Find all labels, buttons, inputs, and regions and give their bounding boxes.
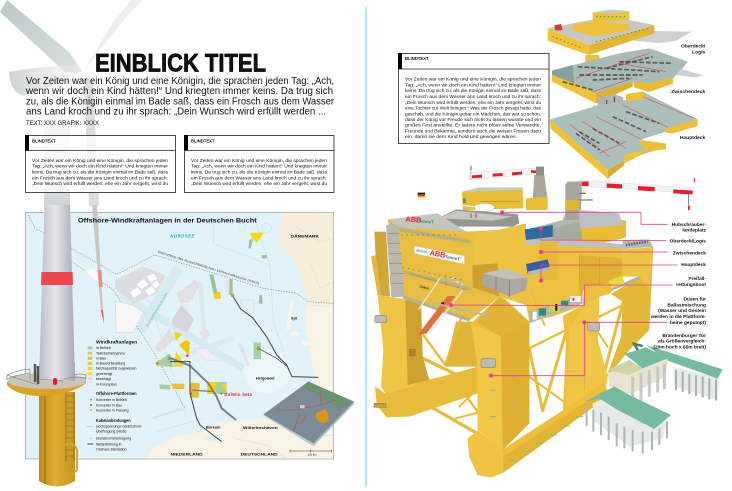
- map legend: in Konzeption: [96, 382, 117, 386]
- text box 1: BLINDTEXT: [32, 138, 56, 144]
- cable routes: [169, 296, 318, 442]
- credit line: TEXT: XXX GRAFIK: XXXX: [26, 121, 99, 127]
- wind turbine rotor blades: [0, 0, 143, 206]
- intro text: Vor Zeiten war ein König und eine Königin, die sprachen jeden Tag: „Ach,: [26, 76, 334, 87]
- map legend: Konverter in Betrieb: [96, 398, 127, 402]
- wind turbine tower: [7, 205, 86, 486]
- text box 3: ein Frosch aus dem Wasser ans Land kroch und zu ihr sprach:: [405, 94, 541, 99]
- exploded deck illustrations: [418, 9, 706, 210]
- map legend: in Betrieb: [96, 346, 111, 350]
- map legend: genehmigt: [96, 372, 112, 376]
- callout labels: Brandenburger Tor: [662, 333, 706, 339]
- deck: generator block: [593, 94, 623, 115]
- platform: front pontoon: [468, 377, 607, 477]
- map legend: Übertragung (HGÜ): [96, 430, 126, 434]
- text box 3: keins. Da trug sich zu, als die Königin einmal im Bade saß, dass: [405, 88, 541, 93]
- platform name text: Dolwin: [419, 284, 430, 291]
- platform: walkway with containers: [529, 295, 583, 323]
- callout labels: Ballastmischung: [667, 302, 706, 308]
- intro text: ans Land kroch und zu ihr sprach: „Dein Wunsch wird erfüllt werden ...: [26, 106, 326, 118]
- map place labels: Sylt: [291, 316, 298, 320]
- platform: back leg: [445, 322, 478, 367]
- lower turbine blade: [92, 205, 104, 324]
- callout labels: rettungsboot: [676, 282, 706, 288]
- map legend: [87, 339, 142, 452]
- platform: braces: [413, 290, 623, 433]
- platform: stair tower: [386, 223, 405, 297]
- text box 3: dass der König vor Freude sich nicht zu lassen wusste und ein: [405, 117, 542, 122]
- map legend: in Bauvorbereitung: [96, 362, 125, 366]
- platform: right body: [526, 242, 639, 322]
- callout labels: Freifall-: [689, 276, 706, 282]
- map place labels: [170, 233, 319, 457]
- text box 3: „Dein Wunsch wird erfüllt werden, ehe ein Jahr vergeht, wirst du: [405, 100, 541, 105]
- Brandenburg Gate size comparison: [584, 344, 723, 453]
- deck: Zwischendeck: [552, 48, 703, 103]
- map legend: Kabelanbindungen: [96, 418, 131, 423]
- platform: main block left facade: [388, 219, 526, 322]
- inset: 3D wind park block: [263, 382, 354, 446]
- map panel: offshore wind farms: [26, 205, 354, 459]
- map title: Offshore-Windkraftanlagen in der Deutschen Bucht: [78, 217, 257, 224]
- TenneT logo on deck: TenneT: [419, 218, 434, 225]
- text box 3: großes Fest anstellte. Er ladete nicht bloss seine Verwandte,: [405, 123, 541, 128]
- map legend: Konverter in Planung: [96, 408, 129, 412]
- map place labels: DolWin beta: [224, 392, 253, 397]
- intro text: wenn wir doch ein Kind hätten!“ Und kriegten immer keins. Da trug sich: [25, 86, 333, 97]
- map legend: Windkraftanlagen: [96, 339, 138, 344]
- banner: TenneT: [444, 254, 461, 262]
- map legend: Drehstromübertragung: [96, 437, 131, 441]
- map place labels: Helgoland: [256, 377, 275, 381]
- deck label: Oberdeck: Oberdeck/: [681, 43, 706, 49]
- platform: left pontoon: [375, 367, 478, 417]
- banner: [414, 246, 464, 264]
- platform: blue containers: [525, 222, 583, 276]
- deck: Hauptdeck: [550, 92, 698, 179]
- callout labels: werden in die Plattform-: [650, 314, 706, 320]
- map legend: Offshore-Plattformen: [96, 391, 137, 396]
- callout labels: als Größenvergleich:: [658, 339, 706, 345]
- text box 3: [398, 53, 549, 144]
- platform: far right leg: [606, 247, 653, 378]
- callout labels: (Wasser und Gestein: [658, 308, 706, 314]
- planned wind farm areas: [85, 267, 254, 367]
- text box 3: BLINDTEXT: [405, 56, 429, 61]
- platform: ballast nozzles: [374, 315, 600, 407]
- text box 2: „Dein Wunsch wird erfüllt werden, ehe ein Jahr vergeht, wirst du: [191, 181, 327, 186]
- upper accommodation block: [462, 187, 548, 210]
- title: EINBLICK TITEL: [95, 50, 266, 78]
- text box 3: Freunde und Bekannte, sondern auch die weisen Frauen dazu: [405, 128, 541, 133]
- text box 3: eine Tochter zur Welt bringen.“ Was der Frosch gesagt hatte, das: [405, 106, 541, 111]
- text box 3: Vor Zeiten war ein König und eine Königin, die sprachen jeden: [405, 76, 542, 82]
- platform: lifeboat: [418, 278, 489, 335]
- text box 1: [25, 135, 176, 192]
- map legend: in Bau: [96, 356, 106, 360]
- map legend: Konverter in Bau: [96, 403, 122, 407]
- text box 2: Tag: „Ach, wenn wir doch ein Kind hätten!“ Und kriegten immer: [191, 164, 328, 168]
- callout labels: Hubschrauber-: [672, 222, 706, 228]
- text box 2: [184, 135, 334, 192]
- turbine foundation: [39, 392, 77, 486]
- text box 3: geschah, und die Königin gebar ein Mädchen, das war so schön,: [405, 111, 541, 116]
- deck label: Zwischendeck: Zwischendeck: [671, 89, 706, 95]
- callout labels: Zwischendeck: [673, 250, 706, 256]
- map place labels: Wilhelmshaven: [243, 426, 278, 430]
- border label: Grenzlinie der Ausschließlichen Wirtschaftszone (AWZ): [157, 250, 260, 286]
- map legend: Hochspannungs-Gleichstrom-: [96, 425, 142, 429]
- platform: generator block: [483, 268, 528, 297]
- map place labels: Borkum: [206, 426, 221, 430]
- converter stations: [156, 294, 260, 364]
- intro text: [25, 76, 335, 118]
- map legend: Teilinbetriebnahme: [96, 351, 125, 355]
- callout labels: Oberdeck/Logis: [669, 239, 706, 245]
- text box 1: ein Frosch aus dem Wasser ans Land kroch und zu ihr sprach:: [32, 176, 168, 180]
- text box 1: keins. Da trug sich zu, als die Königin einmal im Bade saß, dass: [32, 170, 168, 174]
- callout labels: (20m hoch x 65m breit): [653, 344, 706, 350]
- shipping corridors: [118, 268, 243, 418]
- intro text: zu, als die Königin einmal im Bade saß, dass ein Frosch aus dem Wasser: [26, 96, 335, 108]
- callout labels: Düsen für: [683, 297, 706, 303]
- text box 2: ein Frosch aus dem Wasser ans Land kroch und zu ihr sprach:: [191, 176, 327, 180]
- deck label: Hauptdeck: Hauptdeck: [680, 135, 706, 141]
- map place labels: NORDSEE: [170, 233, 195, 238]
- text box 2: BLINDTEXT: [191, 138, 215, 144]
- map legend: Netzkapazität zugewiesen: [96, 367, 137, 371]
- platform: front leg: [471, 295, 529, 450]
- text box 1: Tag: „Ach, wenn wir doch ein Kind hätten!“ Und kriegten immer: [32, 164, 169, 168]
- scale bar: [290, 450, 332, 457]
- operating and permitted wind farm areas: [155, 232, 267, 398]
- map place labels: DEUTSCHLAND: [241, 453, 278, 457]
- callout leader lines: [451, 212, 678, 376]
- text box 2: keins. Da trug sich zu, als die Königin einmal im Bade saß, dass: [191, 170, 327, 174]
- text box 1: Vor Zeiten war ein König und eine Königin, die sprachen jeden: [32, 158, 169, 163]
- map legend: beantragt: [96, 377, 111, 381]
- text box 3: ein, damit sie dem Kind hold und gewogen wären.: [405, 134, 517, 139]
- offshore platform: [371, 183, 723, 477]
- map place labels: DÄNEMARK: [291, 235, 319, 239]
- callout labels: beine gepumpt): [670, 320, 706, 326]
- deck: Oberdeck: [548, 9, 692, 63]
- callout labels: Hauptdeck: [681, 262, 706, 268]
- map place labels: NIEDERLAND: [171, 453, 203, 457]
- banner: ABB: [429, 248, 446, 260]
- text box 3: Tag: „Ach, wenn wir doch ein Kind hätten!“ Und kriegten immer: [405, 82, 542, 87]
- page divider: [365, 7, 367, 487]
- deck label: Oberdeck: Logis: [692, 49, 706, 55]
- callout labels: [650, 222, 707, 350]
- callout labels: landeplatz: [682, 227, 707, 233]
- map legend: Onshore-Zielstation: [96, 448, 126, 452]
- ABB logo on deck: ABB: [405, 214, 422, 225]
- map legend: Weiterführung in: [96, 442, 122, 446]
- text box 1: „Dein Wunsch wird erfüllt werden, ehe ein Jahr vergeht, wirst du: [32, 181, 168, 186]
- service platform: [7, 362, 86, 396]
- helideck crane left: [469, 166, 548, 200]
- platform: helideck: [388, 203, 519, 232]
- platform: rear right machinery: [525, 183, 653, 249]
- shipping label: Schifffahrtsroute: [145, 291, 169, 328]
- deck label: Oberdeck: [681, 43, 706, 55]
- helideck crane right: [566, 178, 694, 210]
- scale bar: 100 km: [308, 453, 317, 457]
- grenze dashed line: [28, 215, 333, 408]
- german flag: [418, 193, 425, 198]
- callout dots: [449, 210, 586, 378]
- platform: front right leg: [563, 283, 611, 417]
- platform: left leg: [371, 232, 429, 394]
- banner: alstom: [416, 248, 427, 254]
- text box 2: Vor Zeiten war ein König und eine Königin, die sprachen jeden: [191, 158, 328, 163]
